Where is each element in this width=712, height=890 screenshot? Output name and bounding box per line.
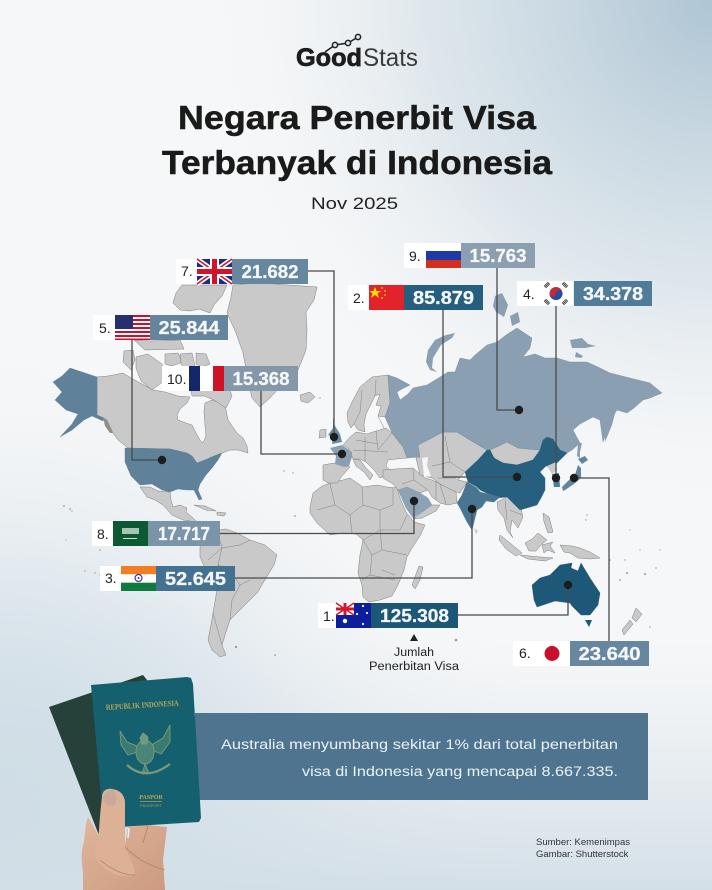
label 9: Russia 15.763 bbox=[404, 243, 535, 268]
label 8: Saudi Arabia 17.717: 8. bbox=[97, 526, 109, 542]
label 4: South Korea 34.378: 4. bbox=[523, 286, 535, 302]
caspian sea bbox=[422, 457, 431, 477]
flag: UK bbox=[197, 259, 232, 284]
map: sri lanka bbox=[474, 528, 478, 534]
flag: China bbox=[369, 285, 404, 310]
canada bbox=[97, 373, 248, 463]
map: india bbox=[457, 482, 500, 530]
iceland bbox=[300, 392, 315, 403]
label 2: China 85.879 bbox=[348, 285, 483, 310]
callout banner bbox=[195, 713, 648, 800]
label 4: South Korea 34.378 bbox=[517, 281, 652, 306]
label 1: Australia 125.308: 125.308 bbox=[380, 606, 449, 626]
map: north korea bbox=[547, 462, 557, 474]
indochina bbox=[497, 497, 523, 538]
subtitle: date: Nov 2025 bbox=[311, 194, 398, 213]
africa bbox=[310, 478, 425, 602]
central asia bbox=[416, 432, 487, 493]
label 10: France 15.368: 10. bbox=[167, 371, 186, 387]
title: Negara Penerbit Visa bbox=[178, 99, 537, 136]
label 1: Australia 125.308: 1. bbox=[323, 608, 335, 624]
europe borders bbox=[353, 380, 392, 462]
madagascar bbox=[412, 566, 423, 589]
label 1: Australia 125.308 bbox=[318, 603, 458, 628]
thumb bbox=[95, 789, 135, 876]
hand creases bbox=[100, 826, 165, 875]
passport small text: PASSPORT bbox=[140, 803, 162, 808]
map: gray countries bbox=[97, 283, 642, 657]
front passport bbox=[91, 677, 201, 828]
label 3: India 52.645 bbox=[100, 566, 235, 591]
annotation: jumlah penerbitan visa: Penerbitan Visa bbox=[369, 661, 460, 673]
map: alaska panhandle bbox=[103, 417, 113, 433]
label 6: Japan 23.640: 23.640 bbox=[578, 644, 640, 664]
annotation: jumlah penerbitan visa: Jumlah bbox=[394, 647, 434, 659]
hand behind bbox=[82, 817, 167, 890]
logo: GoodStats: Stats bbox=[363, 44, 418, 72]
label 8: Saudi Arabia 17.717: 17.717 bbox=[158, 524, 210, 544]
callout banner: visa di Indonesia yang mencapai 8.667.335. bbox=[302, 764, 618, 779]
map: russian arctic islands bbox=[426, 293, 616, 458]
map: south korea bbox=[552, 473, 560, 487]
label 7: United Kingdom 21.682: 21.682 bbox=[242, 262, 298, 282]
label 3: India 52.645: 52.645 bbox=[165, 569, 226, 589]
mongolia bbox=[490, 442, 540, 465]
label 7: United Kingdom 21.682: 7. bbox=[181, 263, 193, 279]
label 7: United Kingdom 21.682 bbox=[176, 259, 308, 284]
indochina borders bbox=[505, 500, 522, 520]
passport subtext bbox=[140, 800, 162, 803]
flag: USA bbox=[115, 315, 150, 340]
label 9: Russia 15.763: 9. bbox=[409, 248, 421, 264]
borneo bbox=[525, 533, 547, 551]
south america bbox=[200, 529, 277, 657]
map: france bbox=[330, 445, 352, 467]
label 2: China 85.879: 85.879 bbox=[413, 288, 474, 308]
label 4: South Korea 34.378: 34.378 bbox=[583, 284, 643, 304]
map: china bbox=[465, 437, 567, 510]
source credits: Gambar: Shutterstock bbox=[536, 849, 629, 860]
label 5: United States 25.844: 5. bbox=[99, 320, 111, 336]
logo: GoodStats: Good bbox=[296, 44, 362, 72]
java bbox=[520, 555, 553, 561]
label 10: France 15.368 bbox=[162, 366, 298, 391]
map: australia bbox=[532, 563, 600, 615]
canadian arctic bbox=[173, 285, 227, 313]
logo: GoodStats bbox=[296, 34, 418, 72]
map: japan bbox=[562, 465, 581, 491]
leader lines bbox=[132, 268, 609, 641]
map: alaska and usa bbox=[53, 368, 222, 500]
paspor text: PASPOR bbox=[139, 795, 163, 801]
map: saudi arabia bbox=[398, 487, 432, 518]
flag: Japan bbox=[544, 646, 560, 661]
new guinea bbox=[560, 545, 600, 559]
label 3: India 52.645: 3. bbox=[105, 570, 117, 586]
africa borders bbox=[317, 484, 407, 580]
philippines bbox=[543, 513, 553, 533]
finger gap bbox=[128, 828, 129, 838]
flag: France bbox=[189, 366, 224, 391]
back passport bbox=[49, 675, 147, 838]
label 2: China 85.879: 2. bbox=[353, 290, 365, 306]
label 6: Japan 23.640: 6. bbox=[519, 645, 531, 661]
map: uk bbox=[328, 418, 342, 444]
label 5: United States 25.844: 25.844 bbox=[158, 318, 220, 338]
italy bbox=[353, 459, 373, 480]
annotation: jumlah penerbitan visa bbox=[369, 634, 460, 673]
central asia borders bbox=[432, 436, 465, 478]
title bbox=[162, 99, 553, 181]
greenland bbox=[227, 283, 317, 407]
turkey and middle east bbox=[383, 468, 457, 505]
cuba and caribbean bbox=[194, 505, 216, 511]
label 9: Russia 15.763: 15.763 bbox=[470, 246, 526, 266]
new zealand bbox=[632, 608, 642, 622]
europe mainland bbox=[343, 428, 407, 478]
flag: Saudi Arabia bbox=[113, 521, 148, 546]
sulawesi bbox=[542, 542, 555, 553]
mexico and central america bbox=[140, 487, 197, 522]
callout banner: Australia menyumbang sekitar 1% dari total penerbitan bbox=[221, 737, 618, 752]
scandinavia bbox=[347, 375, 390, 432]
flag: Russia bbox=[426, 251, 461, 268]
map: russia bbox=[385, 328, 662, 458]
label 6: Japan 23.640 bbox=[513, 641, 649, 666]
passport text: REPUBLIK INDONESIA bbox=[106, 699, 179, 712]
title: Terbanyak di Indonesia bbox=[162, 144, 553, 181]
south america borders bbox=[208, 530, 250, 645]
yemen and oman bbox=[413, 505, 440, 519]
label 10: France 15.368: 15.368 bbox=[232, 369, 290, 389]
flag: India bbox=[121, 566, 156, 591]
world map bbox=[53, 283, 662, 657]
source credits bbox=[536, 837, 630, 860]
sumatra bbox=[499, 535, 522, 556]
map: tasmania bbox=[585, 620, 592, 627]
thumbnail bbox=[103, 790, 116, 806]
ireland bbox=[319, 429, 326, 438]
garuda emblem bbox=[120, 725, 170, 774]
label 5: United States 25.844 bbox=[93, 315, 228, 340]
source credits: Sumber: Kemenimpas bbox=[536, 837, 630, 848]
map: small islands bbox=[63, 397, 661, 656]
middle east borders bbox=[402, 469, 446, 504]
flag: Australia bbox=[336, 603, 371, 628]
iberia bbox=[323, 463, 350, 483]
location dots bbox=[158, 406, 578, 589]
label 8: Saudi Arabia 17.717 bbox=[92, 521, 220, 546]
flag: South Korea bbox=[545, 283, 567, 304]
passport photo bbox=[49, 675, 201, 890]
